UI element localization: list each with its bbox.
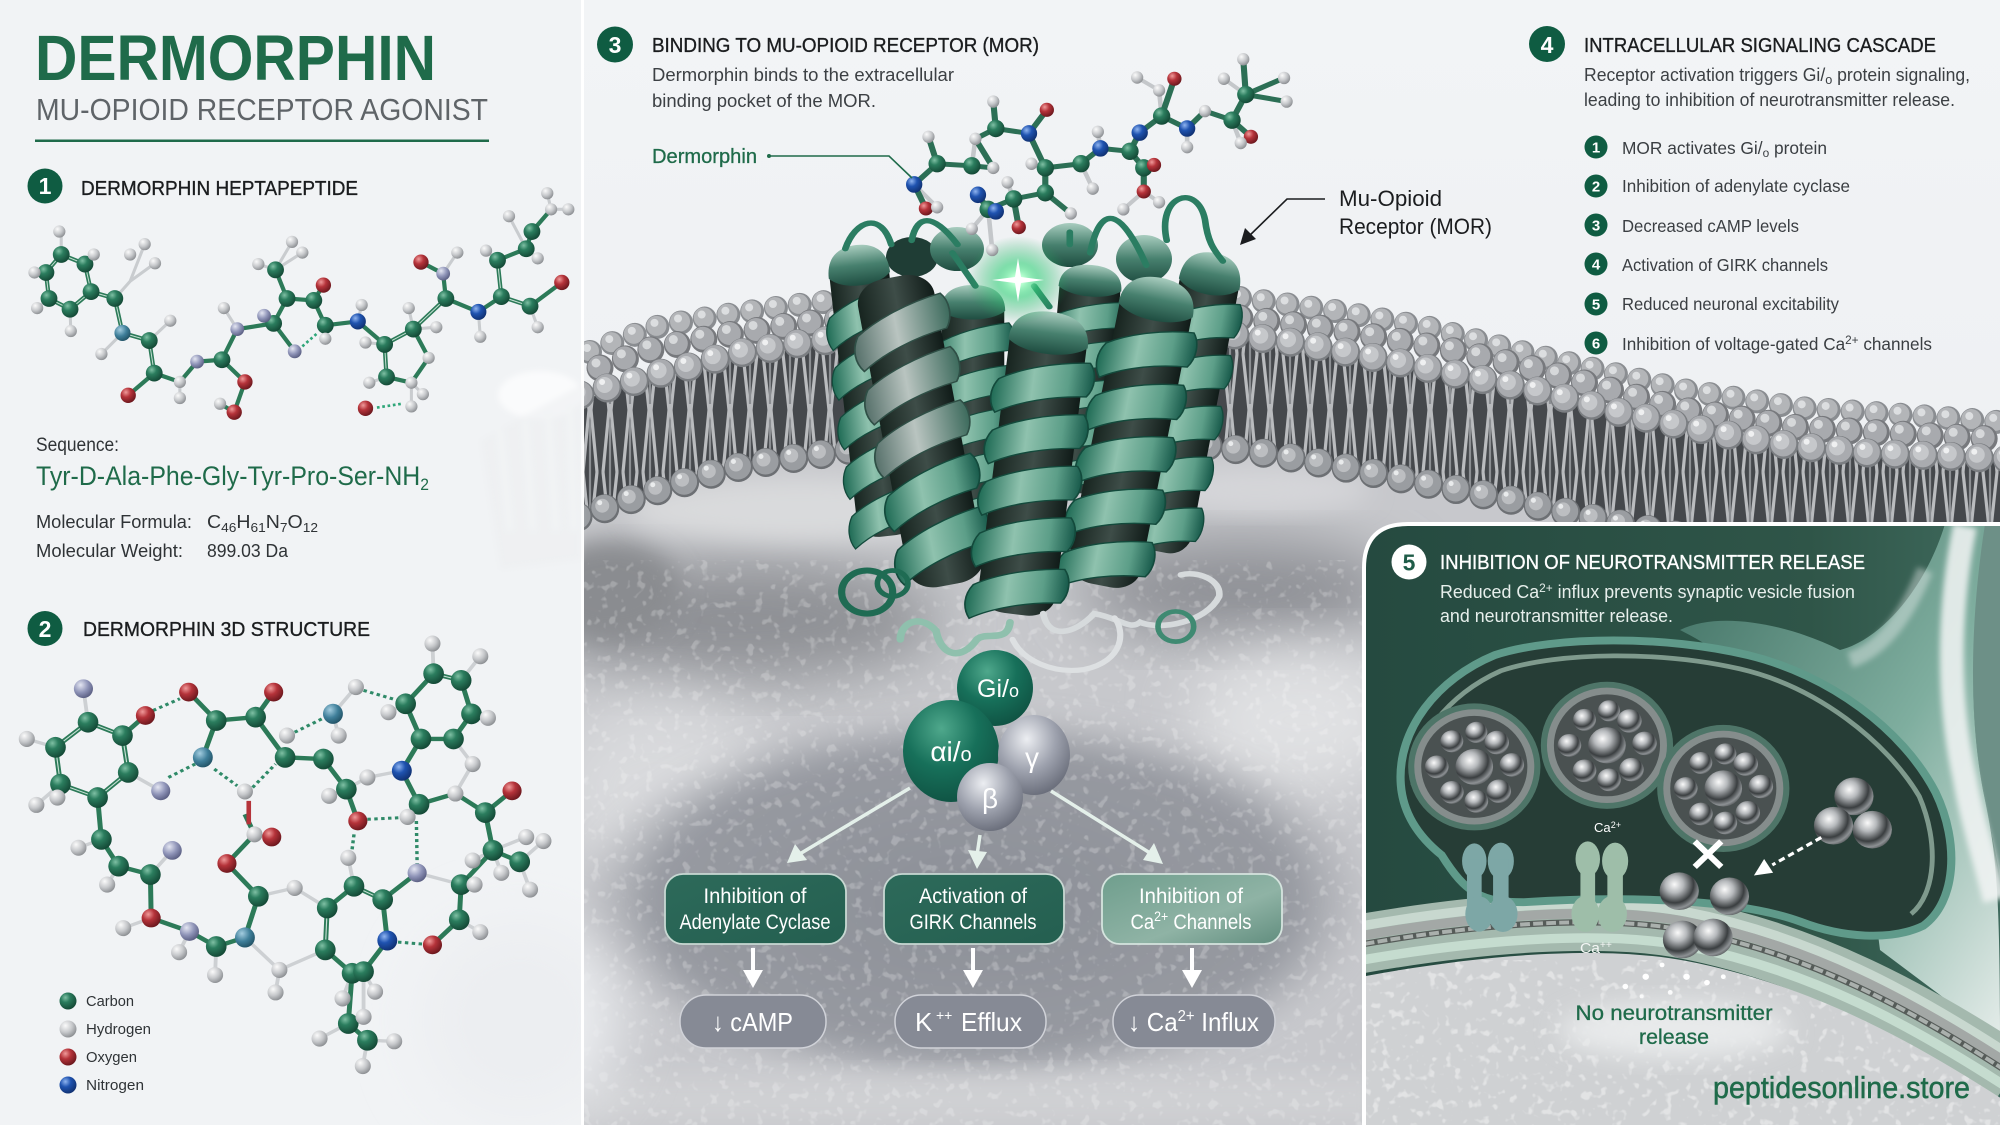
sequence text block: 12 xyxy=(303,520,318,535)
legend: atom colours: Oxygen xyxy=(86,1049,137,1066)
section 4 heading and text: o xyxy=(1825,72,1832,87)
step 5: Reduced neuronal excitability xyxy=(1622,294,1839,314)
sequence text block: 61 xyxy=(251,520,266,535)
panel 5: inhibition of neurotransmitter release xyxy=(1352,524,2000,1125)
sequence text block xyxy=(36,435,429,561)
receptor back caps xyxy=(886,223,1172,283)
no release label: No neurotransmitter xyxy=(1576,1002,1773,1025)
neuron white spray xyxy=(1850,526,1995,900)
blocked fusion X xyxy=(1695,841,1721,867)
section 3 heading and text: BINDING TO MU-OPIOID RECEPTOR (MOR) xyxy=(652,35,1039,57)
pill: Ca influx: 2+ xyxy=(1178,1008,1195,1025)
legend: atom colours: Hydrogen xyxy=(86,1021,151,1038)
molecule: dermorphin heptapeptide xyxy=(28,187,574,420)
step 2: 2 xyxy=(1592,178,1600,196)
membrane heads: front rows xyxy=(573,329,2000,540)
calcium labels: 2+ xyxy=(1611,820,1621,830)
axon terminal xyxy=(1401,640,1951,936)
section 3 heading and text: 3 xyxy=(609,32,621,58)
box: inhibition of Ca channels: Ca xyxy=(1130,911,1157,934)
step 4: Activation of GIRK channels xyxy=(1622,255,1828,275)
membrane: lipid bilayer xyxy=(573,294,2000,560)
pill: K efflux: Efflux xyxy=(961,1007,1022,1037)
section 4 heading and text: INTRACELLULAR SIGNALING CASCADE xyxy=(1584,35,1936,57)
step 6: channels xyxy=(1859,334,1932,354)
callout: Mu-Opioid Receptor label: Receptor (MOR) xyxy=(1339,214,1492,239)
pill: Ca influx xyxy=(1113,995,1275,1048)
arrows from G protein xyxy=(787,788,1163,869)
box: inhibition of adenylate cyclase: Inhibition of xyxy=(704,885,807,908)
pill: Ca influx: ↓ Ca xyxy=(1128,1007,1181,1037)
no release label xyxy=(1559,1002,1789,1058)
membrane heads: back rows xyxy=(587,294,2000,440)
signaling cascade list xyxy=(1584,136,1932,354)
left panel xyxy=(0,0,620,1125)
texture specks near release site xyxy=(1622,963,1726,998)
legend: atom colours: Nitrogen xyxy=(86,1077,144,1094)
vesicles xyxy=(1408,682,1789,852)
step 1: protein xyxy=(1769,138,1827,158)
step 1: 1 xyxy=(1592,140,1600,156)
sequence text block: Tyr-D-Ala-Phe-Gly-Tyr-Pro-Ser-NH xyxy=(36,461,453,491)
section 5 heading and text: 5 xyxy=(1403,550,1416,576)
step 1: o xyxy=(1763,146,1770,160)
G protein complex: β xyxy=(982,783,998,814)
section 1 heading: 1 xyxy=(39,173,52,199)
section 5 heading and text: INHIBITION OF NEUROTRANSMITTER RELEASE xyxy=(1440,552,1865,574)
callout: Mu-Opioid Receptor label: Mu-Opioid xyxy=(1339,186,1442,211)
section 5 heading and text xyxy=(1392,544,1865,626)
step 6: 6 xyxy=(1592,336,1600,352)
section 5 heading and text: influx prevents synaptic vesicle fusion xyxy=(1553,582,1855,602)
step 6: Inhibition of voltage-gated Ca xyxy=(1622,334,1850,354)
sequence text block: H xyxy=(236,511,251,532)
ligand: dermorphin in binding pocket xyxy=(906,53,1293,256)
section 3 heading and text: Dermorphin binds to the extracellular xyxy=(652,65,954,85)
sequence text block: 7 xyxy=(280,520,288,535)
section 4 heading and text: Receptor activation triggers Gi/ xyxy=(1584,65,1831,85)
teal outer space right of neuron xyxy=(1973,524,2000,880)
callout: Dermorphin label: Dermorphin xyxy=(652,146,757,168)
sequence text block: 2 xyxy=(420,475,429,494)
step 3: 3 xyxy=(1592,218,1600,234)
step 1: MOR activates Gi/ xyxy=(1622,138,1764,158)
callout: Mu-Opioid Receptor label xyxy=(1240,186,1492,245)
pill: cAMP xyxy=(680,995,826,1048)
section 5 heading and text: and neurotransmitter release. xyxy=(1440,606,1673,626)
sequence text block: Molecular Formula: xyxy=(36,511,192,532)
title xyxy=(35,22,488,127)
step 1 xyxy=(1584,136,1827,160)
postsynaptic membrane band xyxy=(1352,904,2000,1091)
title: DERMORPHIN xyxy=(35,22,436,94)
binding glow xyxy=(966,236,1070,324)
sequence text block: O xyxy=(288,511,303,532)
receptor: mu-opioid receptor helices xyxy=(817,198,1253,670)
G protein complex: αi/o xyxy=(930,736,972,767)
pill: K efflux: K xyxy=(915,1007,933,1037)
calcium labels: Ca xyxy=(1594,820,1611,835)
down arrows to outcomes xyxy=(743,948,1202,988)
sequence text block: Sequence: xyxy=(36,435,119,456)
box: inhibition of Ca channels xyxy=(1102,874,1282,944)
step 6 xyxy=(1584,332,1932,354)
calcium labels xyxy=(1580,820,1621,957)
postsynaptic cell xyxy=(1352,953,2000,1125)
sequence text block: N xyxy=(266,511,280,532)
membrane tails xyxy=(584,335,2000,560)
section 1 heading xyxy=(28,168,358,204)
pill: K efflux: ++ xyxy=(936,1007,952,1023)
section 3 heading and text: binding pocket of the MOR. xyxy=(652,91,876,111)
sequence text block: 899.03 Da xyxy=(207,540,289,561)
G protein complex: γ xyxy=(1025,742,1039,773)
step 6: 2+ xyxy=(1845,333,1859,347)
section 4 heading and text: protein signaling, xyxy=(1832,65,1970,85)
calcium labels: ++ xyxy=(1600,940,1612,951)
box: activation of GIRK channels: Activation of xyxy=(919,885,1027,908)
dashed arrow xyxy=(1754,837,1821,876)
calcium labels: Ca xyxy=(1580,940,1599,957)
title: MU-OPIOID RECEPTOR AGONIST xyxy=(36,92,488,127)
pill: Ca influx: Influx xyxy=(1195,1007,1259,1037)
neuron neck and shoulder xyxy=(1680,524,2000,1040)
molecule: dermorphin 3D structure xyxy=(19,635,551,1074)
neurotransmitter clusters xyxy=(1660,777,1892,958)
legend: atom colours: Carbon xyxy=(86,993,134,1010)
sequence text block: C xyxy=(207,511,220,532)
box: inhibition of Ca channels: Inhibition of xyxy=(1139,885,1243,908)
pill: cAMP: ↓ cAMP xyxy=(712,1007,793,1037)
section 4 heading and text: leading to inhibition of neurotransmitter release. xyxy=(1584,90,1955,110)
section 4 heading and text: 4 xyxy=(1541,32,1554,58)
synapse illustration xyxy=(1352,524,2000,1125)
pill: K efflux xyxy=(895,995,1046,1048)
callout: Dermorphin label xyxy=(652,146,912,178)
no release label: release xyxy=(1639,1026,1709,1049)
step 4: 4 xyxy=(1592,256,1601,274)
step 3: Decreased cAMP levels xyxy=(1622,216,1799,236)
box: inhibition of Ca channels: 2+ xyxy=(1154,908,1168,924)
section 4 heading and text xyxy=(1529,26,1970,110)
legend: atom colours xyxy=(60,992,151,1094)
faded membrane ghost xyxy=(480,371,582,570)
receptor loops xyxy=(845,198,1223,307)
section 2 heading: DERMORPHIN 3D STRUCTURE xyxy=(83,619,370,641)
step 3 xyxy=(1584,214,1799,236)
box: activation of GIRK channels: GIRK Channels xyxy=(910,911,1036,934)
step 2: Inhibition of adenylate cyclase xyxy=(1622,176,1850,196)
step 5: 5 xyxy=(1592,296,1600,314)
G protein complex: Gi/o xyxy=(977,675,1019,703)
box: inhibition of adenylate cyclase: Adenylate Cyclase xyxy=(680,911,830,934)
box: inhibition of adenylate cyclase xyxy=(665,874,846,944)
cell interior background xyxy=(584,452,1579,1125)
box: inhibition of Ca channels: Channels xyxy=(1168,911,1252,934)
website: peptidesonline.store xyxy=(1713,1070,1970,1105)
helix bundle xyxy=(817,241,1253,630)
section 2 heading xyxy=(28,611,370,646)
section 5 heading and text: Reduced Ca xyxy=(1440,582,1540,602)
section 5 heading and text: 2+ xyxy=(1539,581,1553,595)
section 1 heading: DERMORPHIN HEPTAPEPTIDE xyxy=(81,178,358,200)
sequence text block: Molecular Weight: xyxy=(36,540,183,561)
section 3 heading and text xyxy=(597,26,1039,111)
calcium channels xyxy=(1462,841,1628,932)
sequence text block: 46 xyxy=(221,520,236,535)
G protein complex xyxy=(903,650,1070,831)
section 2 heading: 2 xyxy=(39,616,51,642)
box: activation of GIRK channels xyxy=(884,874,1064,944)
receptor lower loops xyxy=(842,571,1219,670)
